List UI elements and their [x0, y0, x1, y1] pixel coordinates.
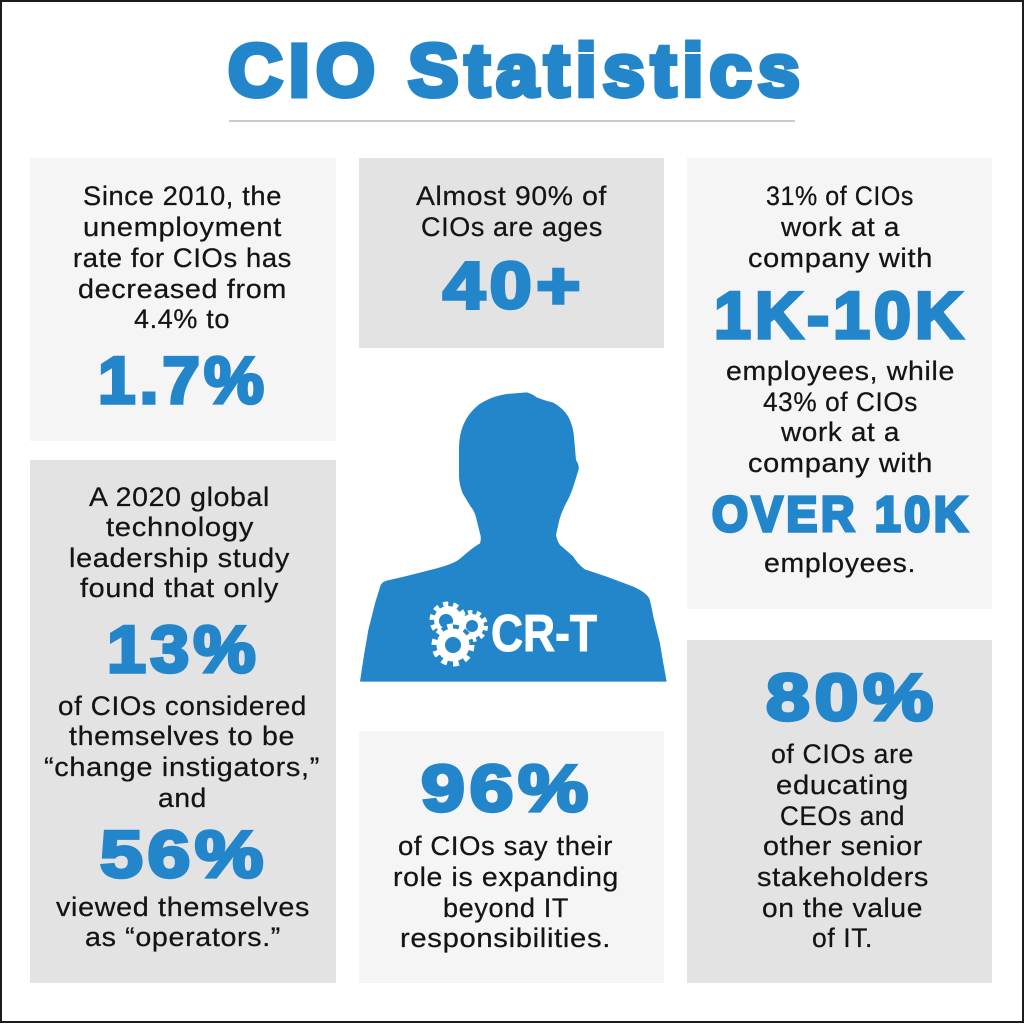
- stat: 96%: 96%: [421, 751, 593, 825]
- panel: unemployment rate: [30, 158, 336, 441]
- panel: leadership study: themselves to be: [69, 721, 295, 751]
- panel: company size: employees.: [764, 548, 916, 578]
- panel: leadership study: found that only: [80, 573, 279, 603]
- panel: leadership study: “change instigators,”: [44, 752, 320, 782]
- panel: unemployment rate: decreased from: [78, 274, 287, 304]
- stat: 56%: 56%: [100, 817, 268, 891]
- panel: leadership study: and: [158, 783, 207, 813]
- panel: leadership study: leadership study: [69, 543, 290, 573]
- panel: company size: 43% of CIOs: [763, 387, 918, 417]
- stat: 40+: 40+: [443, 248, 585, 322]
- panel: company size: [687, 158, 992, 609]
- panel: company size: company with: [748, 243, 933, 273]
- stat: 1.7%: 1.7%: [98, 343, 268, 417]
- panel: leadership study: as “operators.”: [85, 922, 281, 952]
- panel: leadership study: viewed themselves: [56, 892, 310, 922]
- panel: educating CEOs: educating: [776, 770, 909, 800]
- logo text: CR-T: [491, 605, 597, 663]
- panel: educating CEOs: on the value: [762, 893, 923, 923]
- panel: company size: employees, while: [726, 356, 955, 386]
- panel: leadership study: of CIOs considered: [58, 691, 307, 721]
- panel: educating CEOs: stakeholders: [757, 862, 929, 892]
- stat: 1K-10K: 1K-10K: [714, 278, 967, 352]
- panel: company size: work at a: [780, 417, 900, 447]
- stat: 13%: 13%: [107, 612, 260, 686]
- panel: age of CIOs: Almost 90% of: [416, 181, 607, 211]
- panel: leadership study: technology: [106, 512, 254, 542]
- panel: unemployment rate: Since 2010, the: [83, 181, 282, 211]
- panel: role expanding: [359, 731, 664, 983]
- panel: unemployment rate: rate for CIOs has: [73, 243, 292, 273]
- panel: unemployment rate: unemployment: [83, 212, 282, 242]
- panel: role expanding: of CIOs say their: [398, 831, 613, 861]
- panel: leadership study: A 2020 global: [89, 482, 270, 512]
- panel: company size: work at a: [780, 212, 900, 242]
- panel: educating CEOs: [687, 640, 992, 983]
- title: CIO Statistics: [228, 29, 806, 112]
- panel: leadership study: [30, 460, 336, 983]
- panel: educating CEOs: CEOs and: [780, 801, 905, 831]
- panel: educating CEOs: of IT.: [812, 923, 873, 953]
- panel: role expanding: role is expanding: [393, 862, 619, 892]
- panel: company size: 31% of CIOs: [766, 181, 914, 211]
- panel: company size: company with: [748, 448, 933, 478]
- panel: age of CIOs: [359, 158, 664, 348]
- gear: right: [458, 612, 486, 640]
- stat: 80%: 80%: [766, 660, 938, 734]
- panel: educating CEOs: other senior: [763, 831, 923, 861]
- panel: age of CIOs: CIOs are ages: [421, 212, 603, 242]
- panel: unemployment rate: 4.4% to: [134, 304, 230, 334]
- gear: upper left: [432, 604, 464, 636]
- icon: person silhouette with CR-T logo: [360, 392, 667, 682]
- gear: large: [432, 624, 474, 666]
- panel: role expanding: beyond IT: [443, 893, 569, 923]
- panel: educating CEOs: of CIOs are: [771, 739, 914, 769]
- stat: OVER 10K: OVER 10K: [712, 488, 971, 542]
- panel: role expanding: responsibilities.: [400, 923, 611, 953]
- icon: gears: [432, 604, 486, 666]
